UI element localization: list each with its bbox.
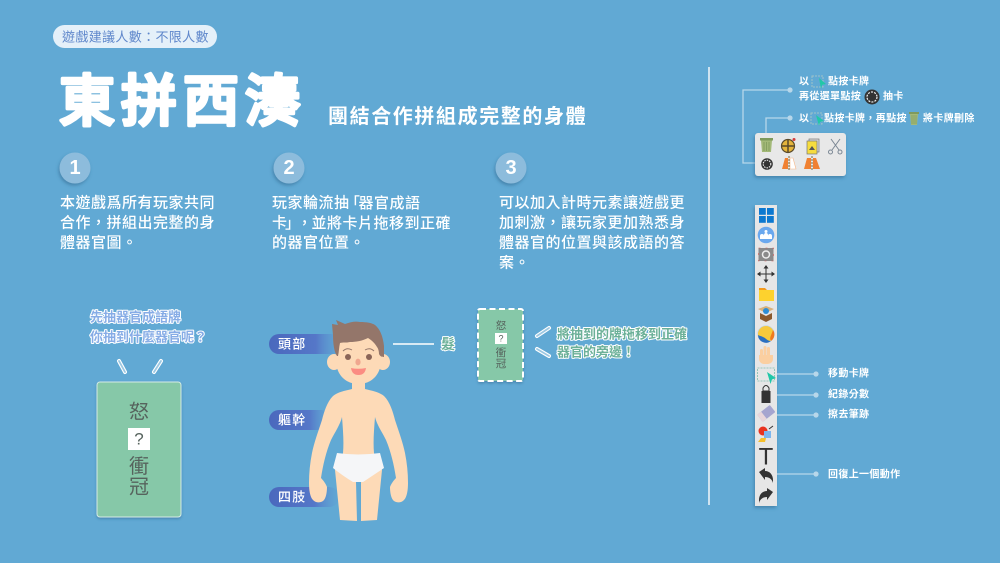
step 2 text: 的器官位置。: [272, 234, 365, 252]
icon: undo: [759, 468, 773, 483]
label: limbs: [269, 487, 339, 507]
icon: people: [758, 227, 774, 243]
annotation: erase strokes: [777, 408, 869, 420]
label: head: [269, 334, 341, 354]
icon: shapes: [758, 426, 773, 442]
title: 東拼西湊: [59, 70, 307, 133]
icon: box: [758, 306, 774, 322]
icon: marker: [762, 386, 770, 403]
callout: drag card: 器官的旁邊！: [557, 344, 635, 360]
step 1 text: [60, 194, 215, 252]
icon: redo: [759, 488, 773, 503]
callout: draw a card: 先抽器官成語牌: [90, 310, 181, 324]
idiom card large: 怒: [129, 400, 149, 424]
step 2 text: 玩家輪流抽: [272, 194, 350, 212]
icon: scissors: [828, 139, 842, 154]
icon: film reel: [782, 138, 796, 152]
step 2 text: 並將卡片拖移到正確: [312, 214, 451, 232]
icon: trash: [909, 112, 919, 125]
number badge 1: [60, 152, 90, 184]
popup menu panel: [755, 133, 846, 176]
icon: hand: [759, 346, 773, 364]
connector lines top menu: [743, 87, 793, 163]
icon: aperture: [864, 90, 880, 104]
idiom card large: [97, 382, 181, 517]
icon: select cursor: [758, 368, 776, 384]
idiom card small dashed: 冠: [496, 358, 507, 370]
connector line to hair: [393, 343, 434, 345]
note: delete card instruction: [799, 112, 975, 126]
note: draw card instruction: [799, 74, 904, 104]
idiom card large: 衝: [129, 455, 149, 478]
step 2 text: 卡: [272, 214, 288, 232]
annotation: undo: 回復上一個動作: [828, 468, 900, 480]
label: torso: [269, 410, 331, 430]
annotation: move card: [777, 366, 869, 380]
icon: select cursor: [812, 76, 826, 89]
annotation: record score: 紀錄分數: [828, 388, 869, 400]
step 1 text: 合作，拼組出完整的身: [60, 214, 215, 232]
sparkle lines above card: [119, 361, 161, 372]
idiom card large: ?: [134, 430, 144, 448]
divider: [708, 67, 710, 505]
icon: eraser: [757, 405, 775, 422]
icon: select cursor: [811, 113, 824, 126]
step 3 text: 加刺激，讓玩家更加熟悉身: [499, 214, 685, 232]
step 1: [60, 152, 215, 252]
icon: text tool: T: [759, 444, 774, 470]
callout: drag card: [557, 326, 687, 360]
ears: [327, 354, 390, 370]
icon: full mirror: [804, 156, 820, 171]
step 3 text: [499, 194, 685, 272]
briefs: [333, 453, 384, 482]
number badge 1: 1: [69, 157, 81, 179]
human figure: [309, 320, 408, 521]
icon: aperture: [761, 158, 773, 170]
step 3 text: 案。: [499, 254, 530, 272]
note: draw card instruction: 再從選單點按: [799, 90, 861, 102]
number badge 3: 3: [505, 157, 517, 179]
idiom card small dashed: 衝: [496, 346, 507, 359]
hair: [332, 320, 384, 357]
icon: camera frame: [758, 248, 774, 261]
note: delete card instruction: 點按卡牌，再點按: [824, 112, 907, 124]
note: delete card instruction: 將卡牌刪除: [923, 112, 975, 124]
word: hair: 髮: [441, 336, 455, 352]
label: limbs: 四肢: [278, 490, 306, 504]
icon: move arrows: [757, 265, 775, 283]
step 2 text: [272, 194, 451, 252]
idiom card small dashed: 怒: [496, 319, 507, 332]
note: delete card instruction: 以: [799, 114, 809, 124]
icon: windows: [759, 208, 774, 223]
vertical toolbar: [755, 205, 777, 506]
face: [336, 328, 381, 384]
icon: swirl ball: [758, 326, 774, 343]
number badge 2: 2: [283, 157, 295, 179]
step 2 text: 「: [345, 194, 361, 212]
annotation: move card: 移動卡牌: [828, 366, 869, 380]
callout: draw a card: 你抽到什麼器官呢？: [90, 330, 207, 344]
callout: drag card: 將抽到的牌拖移到正確: [557, 326, 687, 342]
idiom card small dashed: [478, 309, 523, 381]
annotation: erase strokes: 擦去筆跡: [828, 408, 869, 420]
step 2: [272, 152, 451, 252]
step 1 text: 體器官圖。: [60, 234, 138, 252]
pointer lines: [537, 328, 549, 356]
step 2 text: 器官成語: [358, 194, 421, 212]
step 1 text: 本遊戲爲所有玩家共同: [60, 194, 215, 212]
body: [309, 380, 408, 521]
icon: documents: [807, 139, 819, 154]
label: torso: 軀幹: [278, 412, 306, 428]
step 2 text: 」: [285, 214, 301, 232]
icon: half mirror: [782, 156, 796, 171]
note: draw card instruction: 抽卡: [883, 90, 904, 102]
subtitle: 團結合作拼組成完整的身體: [328, 104, 587, 128]
player count pill: 遊戲建議人數：不限人數: [62, 30, 209, 44]
annotation: record score: [777, 388, 869, 400]
idiom card large: 冠: [129, 476, 149, 498]
callout: draw a card: [90, 310, 207, 344]
number badge 3: [496, 152, 526, 184]
step 3 text: 可以加入計時元素讓遊戲更: [499, 194, 685, 212]
note: draw card instruction: 點按卡牌: [828, 74, 869, 88]
label: head: 頭部: [278, 336, 306, 352]
facial features: [343, 349, 374, 375]
step 3 text: 體器官的位置與該成語的答: [499, 234, 685, 252]
step 2 text: ，: [297, 214, 313, 232]
icon: folder: [759, 288, 774, 301]
step 3: [496, 152, 685, 272]
player count pill: [53, 25, 217, 48]
number badge 2: [274, 152, 304, 184]
note: draw card instruction: 以: [799, 76, 809, 88]
idiom card small dashed: ?: [498, 334, 504, 344]
icon: trash: [760, 138, 773, 152]
annotation: undo: [777, 468, 900, 480]
